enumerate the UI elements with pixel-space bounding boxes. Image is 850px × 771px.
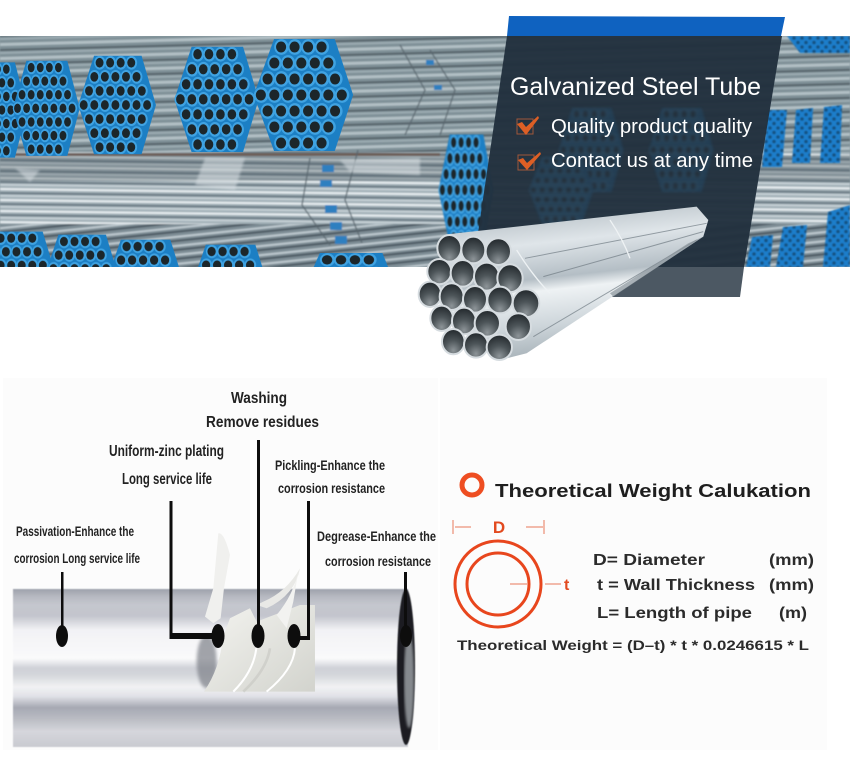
label: degrease: Degrease-Enhance the bbox=[317, 528, 436, 544]
definition: wall thickness: t = Wall Thickness bbox=[597, 577, 755, 594]
formula: Theoretical Weight = (D–t) * t * 0.0246615 * L bbox=[457, 637, 810, 653]
label: pickling: corrosion resistance bbox=[278, 480, 385, 496]
bundle: third bbox=[78, 56, 156, 154]
heading: Galvanized Steel Tube: Galvanized Steel Tube bbox=[510, 73, 761, 101]
pipe bundles, top row bbox=[0, 39, 353, 158]
label: passivation bbox=[14, 523, 140, 566]
definition: length: (m) bbox=[779, 605, 807, 622]
text: contact: Contact us at any time bbox=[551, 150, 753, 172]
diagram: pipe cross-section bbox=[453, 518, 570, 627]
pipe bodies bbox=[430, 207, 708, 360]
definition: length: L= Length of pipe bbox=[597, 605, 752, 622]
pipe open end bbox=[397, 589, 415, 745]
icon: orange ring bbox=[462, 475, 482, 495]
definition: diameter: D= Diameter bbox=[593, 552, 705, 569]
panel: zinc coating process diagram bbox=[3, 378, 438, 750]
definition: diameter bbox=[593, 552, 814, 569]
panel interior blue texture bbox=[529, 108, 714, 224]
label: degrease bbox=[317, 528, 436, 569]
label: passivation: Passivation-Enhance the bbox=[16, 523, 134, 539]
icon: check mark 1 bbox=[517, 116, 539, 135]
blue header strip of panel bbox=[507, 16, 785, 36]
label: uniform-zinc plating bbox=[109, 443, 224, 488]
product photo: bundle of galvanized pipes bbox=[419, 207, 708, 360]
label: washing bbox=[206, 390, 319, 431]
bundle: second bbox=[13, 61, 80, 156]
definition: wall thickness: (mm) bbox=[769, 577, 814, 594]
label: degrease: corrosion resistance bbox=[325, 553, 431, 569]
label: passivation: corrosion Long service life bbox=[14, 550, 140, 566]
pipe bundles, right side bbox=[438, 36, 850, 267]
bundle: fourth bbox=[174, 47, 259, 152]
bundle: fifth bbox=[254, 39, 353, 151]
text: quality: Quality product quality bbox=[551, 116, 752, 138]
lower panel extension bbox=[468, 267, 744, 297]
label: pickling bbox=[275, 457, 385, 496]
heading: calculation: Theoretical Weight Calukation bbox=[495, 480, 811, 501]
leader lines and dots bbox=[56, 440, 412, 648]
bundle: far left bbox=[0, 62, 20, 158]
photo banner: stacked galvanized pipes bbox=[0, 36, 850, 267]
diagram: pipe cross-section: t bbox=[564, 577, 570, 594]
diagram: pipe cross-section: D bbox=[493, 518, 505, 537]
cutaway layers bbox=[197, 533, 315, 692]
pipe illustration bbox=[13, 533, 415, 747]
label: washing: Remove residues bbox=[206, 414, 319, 431]
dark translucent title panel bbox=[473, 36, 782, 267]
definition: wall thickness bbox=[597, 577, 814, 594]
pipe bundles, bottom row bbox=[0, 232, 388, 267]
label: uniform-zinc plating: Uniform-zinc plating bbox=[109, 443, 224, 460]
panel: theoretical weight calculation bbox=[440, 378, 827, 750]
label: uniform-zinc plating: Long service life bbox=[122, 471, 212, 488]
definition: diameter: (mm) bbox=[769, 552, 814, 569]
checklist item 2 bbox=[518, 150, 753, 172]
label: washing: Washing bbox=[231, 390, 287, 407]
label: pickling: Pickling-Enhance the bbox=[275, 457, 385, 473]
definition: length bbox=[597, 605, 807, 622]
pipe openings bbox=[419, 235, 539, 360]
checklist item 1 bbox=[517, 116, 752, 138]
icon: check mark 2 bbox=[518, 152, 541, 170]
